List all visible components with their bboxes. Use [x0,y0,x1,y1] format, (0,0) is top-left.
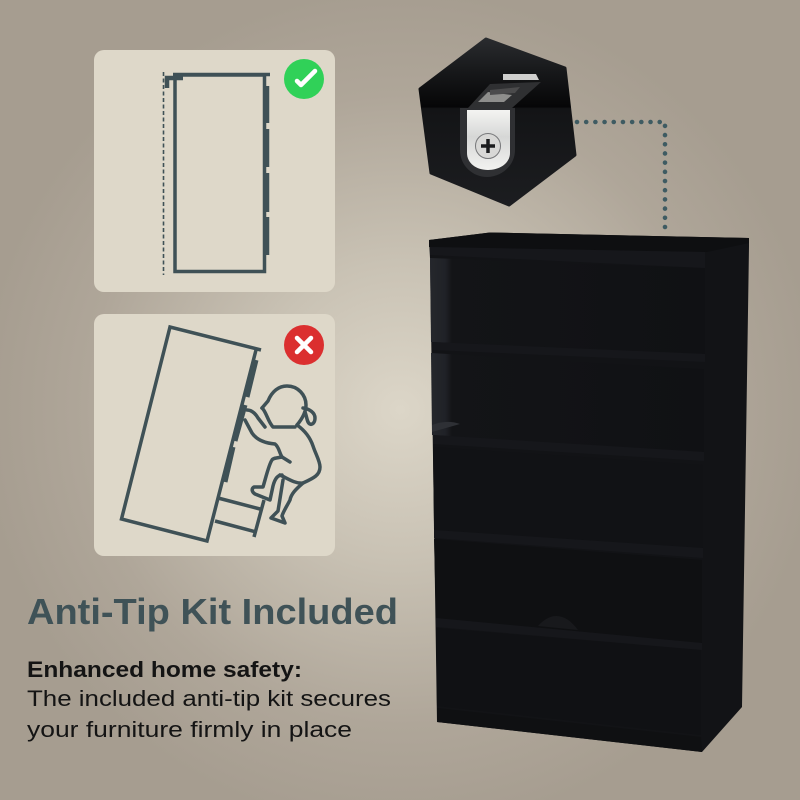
drawer 1 [430,258,705,354]
drawer 4 reflection [538,616,578,630]
text block: description [27,657,391,742]
drawer 2 [431,353,704,452]
bracket shell [460,108,515,177]
chest of drawers [429,232,749,752]
screw [476,134,500,158]
drawer 3 [433,447,703,548]
icon: green check [284,59,324,99]
panel: correct installation [94,50,335,292]
text block: description: Enhanced home safety: [27,657,302,682]
gloss highlight [432,422,460,432]
title: Anti-Tip Kit Included [27,591,398,632]
dotted connector [577,122,665,235]
drawer 4 [434,539,702,643]
callout: wall bracket close-up [420,39,575,205]
bracket top plate [503,74,539,80]
text block: description: your furniture firmly in place [27,717,352,742]
icon: red cross [284,325,324,365]
text block: description: The included anti-tip kit secures [27,686,391,711]
bracket plate [467,110,510,170]
drawer 5 [436,628,701,735]
chest body and side [429,232,749,752]
icon: secured cabinet outline [164,72,270,275]
icon: climbing child [245,386,320,523]
chest top [429,232,749,252]
drawer lips [430,247,705,650]
base [437,708,702,752]
panel: tipping hazard [94,314,335,556]
icon: tipping cabinet [122,327,264,541]
